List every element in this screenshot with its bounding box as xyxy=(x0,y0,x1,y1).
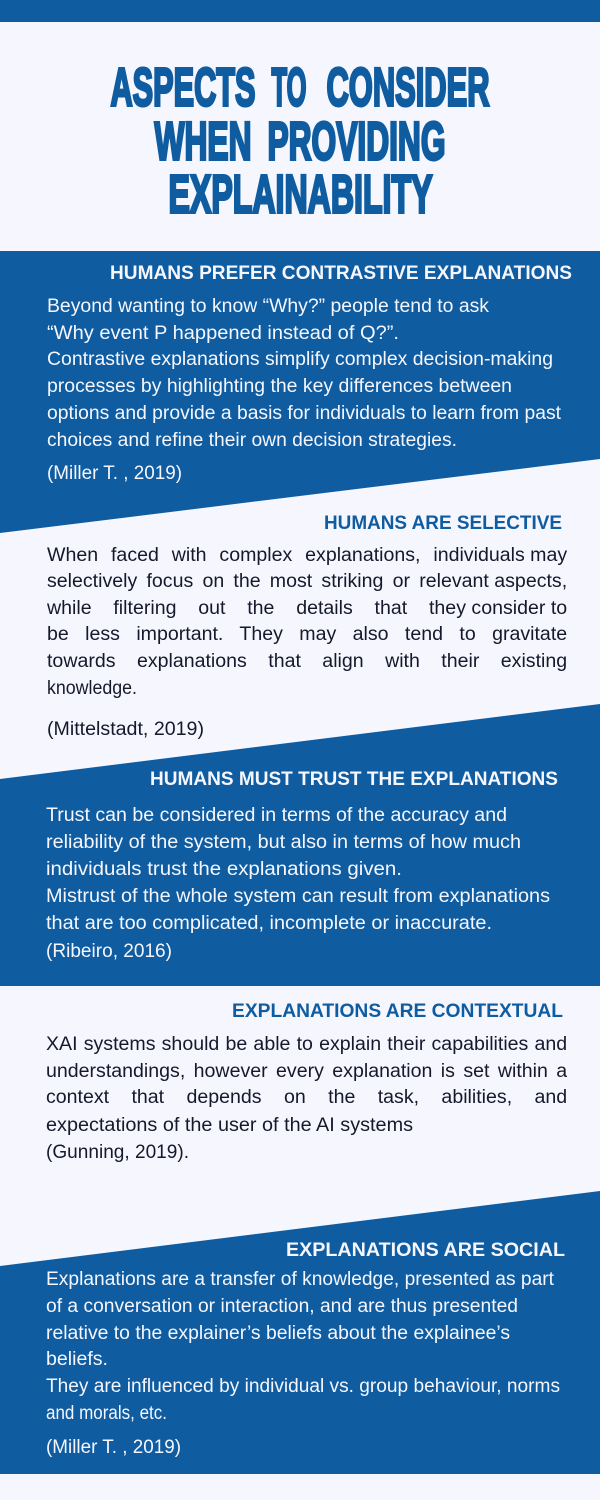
body text: options and provide a basis for individuals to learn from past xyxy=(47,403,562,424)
body text: Beyond wanting to know “Why?” people tend to ask xyxy=(47,296,490,317)
title: WHEN xyxy=(154,112,252,172)
citation: (Miller T. , 2019) xyxy=(46,1437,181,1458)
body text: knowledge. xyxy=(47,678,137,699)
body text xyxy=(46,1269,560,1424)
body text: while filtering out the details that xyxy=(47,598,407,619)
body text: Trust can be considered in terms of the accuracy and xyxy=(46,805,507,826)
body text: Contrastive explanations simplify complex decision-making xyxy=(47,349,553,370)
panel background xyxy=(0,704,600,986)
title: TO xyxy=(272,58,306,118)
body text: XAI systems should be able to explain their capabilities and xyxy=(46,1034,567,1055)
body text: selectively focus on the most striking or xyxy=(47,571,410,592)
body text: of a conversation or interaction, and are thus presented xyxy=(46,1296,518,1317)
body text: they consider to xyxy=(429,598,567,619)
body text: context that depends on the task, abilities, and xyxy=(46,1087,567,1108)
title xyxy=(110,58,490,224)
body text: Explanations are a transfer of knowledge, presented as part xyxy=(46,1269,555,1290)
body text: understandings, however every explanation is set within a xyxy=(46,1061,567,1082)
panel: humans prefer contrastive explanations xyxy=(0,251,600,533)
body text: processes by highlighting the key differences between xyxy=(47,376,512,397)
body text: (Gunning, 2019). xyxy=(46,1142,189,1163)
panel: humans are selective xyxy=(47,513,567,740)
body text: reliability of the system, but also in terms of how much xyxy=(46,832,521,853)
body text xyxy=(47,296,562,451)
panel: explanations are contextual xyxy=(46,1001,567,1163)
body text: “Why event P happened instead of Q?”. xyxy=(47,323,399,344)
body text: relevant aspects, xyxy=(419,571,567,592)
citation: (Ribeiro, 2016) xyxy=(46,941,172,962)
title: ASPECTS xyxy=(110,58,256,118)
citation: (Mittelstadt, 2019) xyxy=(47,719,204,740)
body text: that are too complicated, incomplete or inaccurate. xyxy=(46,913,492,934)
body text: Mistrust of the whole system can result from explanations xyxy=(46,886,550,907)
body text: individuals trust the explanations given. xyxy=(46,859,402,880)
heading: EXPLANATIONS ARE SOCIAL xyxy=(286,1240,565,1261)
body text: choices and refine their own decision strategies. xyxy=(47,430,457,451)
title: EXPLAINABILITY xyxy=(168,164,432,224)
body text: towards explanations that align with their existing xyxy=(47,651,567,672)
citation: (Miller T. , 2019) xyxy=(47,463,182,484)
panel: explanations are social xyxy=(0,1191,600,1474)
heading: EXPLANATIONS ARE CONTEXTUAL xyxy=(232,1001,563,1022)
body text xyxy=(46,805,550,934)
body text: relative to the explainer’s beliefs about the explainee’s xyxy=(46,1323,510,1344)
heading: HUMANS MUST TRUST THE EXPLANATIONS xyxy=(150,769,558,790)
top banner xyxy=(0,0,600,22)
body text xyxy=(46,1031,567,1163)
heading: HUMANS ARE SELECTIVE xyxy=(324,513,562,534)
body text: be less important. They may also tend to gravitate xyxy=(47,624,567,645)
body text: expectations of the user of the AI systems xyxy=(46,1115,413,1136)
panel background xyxy=(0,251,600,533)
body text: When faced with complex explanations, xyxy=(47,545,420,566)
body text: beliefs. xyxy=(46,1349,108,1370)
heading: HUMANS PREFER CONTRASTIVE EXPLANATIONS xyxy=(110,263,572,284)
body text: individuals may xyxy=(433,545,567,566)
body text: and morals, etc. xyxy=(46,1403,167,1424)
panel background xyxy=(0,1191,600,1474)
body text xyxy=(47,542,567,699)
body text: They are influenced by individual vs. group behaviour, norms xyxy=(46,1376,560,1397)
panel: humans must trust the explanations xyxy=(0,704,600,986)
title: PROVIDING xyxy=(268,112,446,172)
